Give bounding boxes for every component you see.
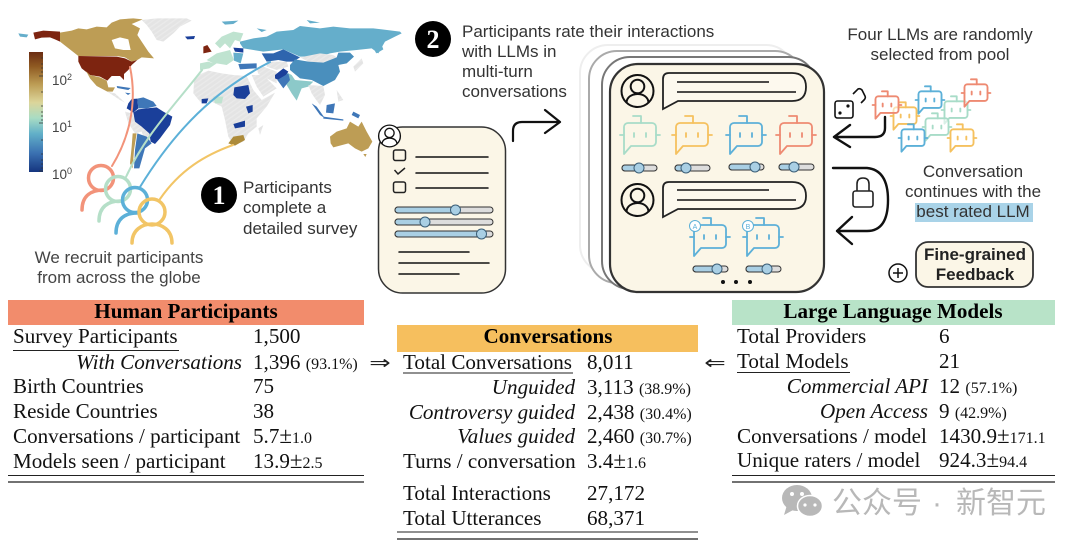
- text: recruit participants: [35, 248, 203, 287]
- panel: conversations table: 27,172: [587, 481, 645, 505]
- watermark: 新智元: [956, 487, 1046, 520]
- panel: conversations table: 3,113 (38.9%): [587, 375, 691, 399]
- central asia: [267, 62, 288, 70]
- icon: dice: [835, 89, 865, 118]
- panel: conversations table: Total Utterances: [403, 506, 542, 530]
- icon: plus: [889, 264, 907, 282]
- colour scale: 0: [67, 166, 72, 176]
- colour scale: 10: [52, 73, 67, 88]
- icon: yellow person: [132, 199, 172, 243]
- panel: large language models table: 1430.9±171.1: [939, 423, 1046, 448]
- panel: large language models table: 12 (57.1%): [939, 374, 1017, 398]
- panel: conversations table: Turns / conversation: [403, 449, 576, 473]
- icon: participants group: [82, 166, 172, 243]
- western europe: [200, 50, 234, 70]
- colombia: [127, 99, 138, 113]
- panel: conversations table: 3.4±1.6: [587, 448, 646, 473]
- bot rating sliders: [622, 162, 814, 173]
- panel: large language models table: 9 (42.9%): [939, 399, 1007, 423]
- panel: human participants table: 13.9±2.5: [253, 448, 323, 473]
- text: best rated LLM: [905, 162, 1041, 222]
- arrow: participants to conversations: ⇒: [369, 352, 391, 374]
- panel: human participants table: Models seen / participant: [13, 449, 226, 473]
- panel: large language models table: Open Access: [820, 399, 928, 423]
- panel: stacked conversation cards: [580, 45, 824, 292]
- china: [290, 53, 354, 86]
- indonesia and malaysia: [312, 103, 360, 121]
- ellipsis dots: [721, 280, 752, 284]
- step 1 badge: [201, 177, 237, 213]
- colour scale: [29, 52, 72, 182]
- panel: large language models table: 21: [939, 349, 960, 373]
- australia: [330, 122, 372, 157]
- text: step 2: conversations: [462, 82, 567, 101]
- brazil: [133, 107, 172, 144]
- india: [285, 72, 313, 101]
- arrow: survey to conversation: [513, 110, 560, 141]
- argentina: [134, 133, 152, 168]
- icon: bots A and B: [690, 218, 783, 256]
- A and B sliders: [693, 264, 781, 274]
- panel: human participants table: 75: [253, 374, 274, 398]
- hatched east asia: [337, 58, 363, 102]
- icon: LLM pool: [873, 79, 990, 152]
- survey checkboxes: [394, 150, 406, 192]
- text: best rated LLM: Conversation: [923, 162, 1023, 181]
- pakistan: [277, 73, 290, 88]
- watermark: ·: [932, 487, 942, 520]
- caribbean: [117, 86, 131, 95]
- greenland: [142, 18, 192, 42]
- colour scale: 2: [67, 72, 72, 82]
- middle east: [252, 67, 277, 97]
- panel: human participants table: Reside Countries: [13, 399, 158, 423]
- usa: [78, 56, 137, 81]
- fine-grained feedback box: Feedback: [936, 265, 1015, 284]
- panel: human participants table: Human Participants: [94, 299, 278, 323]
- panel: conversations table: 68,371: [587, 506, 645, 530]
- sudan, kenya, zambia, ghana: [202, 85, 253, 128]
- icon: green person: [99, 176, 130, 221]
- survey text lines: [399, 157, 489, 274]
- icon: survey person: [379, 125, 400, 147]
- madagascar: [258, 125, 263, 135]
- text: recruit participants: We recruit participants: [35, 248, 203, 267]
- central america: [107, 92, 125, 103]
- icon: four bots: [620, 116, 816, 154]
- text: four LLMs: Four LLMs are randomly: [847, 25, 1033, 44]
- panel: large language models table: Total Providers: [737, 324, 866, 348]
- south africa: [228, 135, 245, 146]
- text: step 1: complete a: [243, 198, 327, 217]
- panel: human participants table: 1,396 (93.1%): [253, 350, 358, 374]
- panel: human participants table: [8, 299, 364, 482]
- panel: conversations table: 2,438 (30.4%): [587, 400, 692, 424]
- panel: survey card: [378, 125, 506, 293]
- main card: [610, 64, 824, 292]
- step 2 badge: [415, 21, 451, 57]
- colour scale: 10: [52, 120, 67, 135]
- panel: conversations table: Values guided: [457, 424, 575, 448]
- watermark: [782, 485, 1046, 520]
- colour scale: 1: [67, 119, 72, 129]
- world map: [18, 18, 402, 168]
- panel: large language models table: Total Models: [737, 349, 849, 373]
- panel: large language models table: Commercial API: [787, 374, 929, 398]
- panel: large language models table: 924.3±94.4: [939, 447, 1027, 472]
- panel: large language models table: [732, 299, 1055, 482]
- panel: conversations table: Controversy guided: [409, 400, 575, 424]
- chile: [130, 133, 137, 168]
- text: step 1: [243, 178, 358, 238]
- arrow: models to conversations: ⇐: [704, 352, 726, 374]
- eastern europe: [233, 53, 243, 63]
- survey sliders: [395, 205, 493, 239]
- southeast asia: [308, 85, 325, 105]
- afghanistan: [275, 68, 288, 82]
- text: recruit participants: from across the globe: [37, 268, 201, 287]
- small northern islands: [18, 20, 320, 37]
- panel: human participants table: Conversations / participant: [13, 424, 240, 448]
- hudson bay: [112, 37, 131, 50]
- watermark: 公众号: [832, 487, 922, 520]
- alaska: [33, 31, 60, 42]
- text: step 1: Participants: [243, 178, 332, 197]
- panel: conversations table: 2,460 (30.7%): [587, 424, 692, 448]
- panel: conversations table: Unguided: [492, 375, 575, 399]
- fine-grained feedback box: [916, 242, 1033, 287]
- panel: conversations table: [397, 324, 698, 539]
- scandinavia: [215, 32, 243, 48]
- icon: bots A and B: B: [746, 224, 751, 231]
- text: four LLMs: [847, 25, 1033, 64]
- nigeria: [213, 97, 223, 103]
- text: best rated LLM: continues with the: [905, 182, 1041, 201]
- icon: wechat: [782, 485, 822, 516]
- hatched south america: [125, 112, 152, 142]
- panel: conversations table: Conversations: [484, 324, 612, 348]
- panel: large language models table: Conversations / model: [737, 424, 927, 448]
- step 2 badge: 2: [426, 25, 440, 54]
- panel: large language models table: Large Language Models: [783, 299, 1003, 323]
- fine-grained feedback box: Fine-grained: [924, 245, 1026, 264]
- panel: human participants table: With Conversations: [76, 350, 242, 374]
- panel: human participants table: 1,500: [253, 324, 300, 348]
- uk: [203, 45, 212, 53]
- panel: conversations table: 8,011: [587, 350, 634, 374]
- panel: large language models table: Unique raters / model: [737, 448, 920, 472]
- panel: conversations table: Total Interactions: [403, 481, 551, 505]
- speech bubble 2: [663, 182, 806, 217]
- icon: user 1: [622, 75, 654, 107]
- text: four LLMs: selected from pool: [871, 45, 1009, 64]
- icon: blue person: [116, 188, 148, 233]
- panel: human participants table: 5.7±1.0: [253, 423, 312, 448]
- panel: conversations table: Total Conversations: [403, 350, 572, 374]
- canada: [60, 18, 154, 62]
- text: step 2: Participants rate their interactions: [462, 22, 714, 41]
- back cards: [580, 45, 816, 289]
- text: step 1: detailed survey: [243, 219, 358, 238]
- mexico: [86, 71, 115, 92]
- panel: large language models table: 6: [939, 324, 950, 348]
- ukraine: [233, 48, 243, 53]
- africa: [193, 71, 275, 145]
- icon: user 2: [622, 184, 654, 216]
- arrow: from pool to card: [834, 117, 885, 147]
- step 1 badge: 1: [212, 181, 226, 210]
- russia: [240, 26, 402, 57]
- turkey: [238, 63, 257, 69]
- text: step 2: [461, 22, 714, 101]
- arrow: locked loop: [833, 168, 888, 244]
- text: step 2: with LLMs in: [461, 42, 556, 61]
- panel: human participants table: 38: [253, 399, 274, 423]
- icon: lock: [853, 178, 873, 207]
- mongolia: [300, 53, 337, 63]
- colour scale: 10: [52, 167, 67, 182]
- kazakhstan: [262, 49, 300, 62]
- icon: coral person: [82, 166, 114, 210]
- recruitment arcs: [112, 62, 270, 199]
- japan and korea: [375, 45, 383, 53]
- text: step 2: multi-turn: [462, 62, 533, 81]
- speech bubble 1: [663, 73, 806, 109]
- text: best rated LLM: best rated LLM: [916, 202, 1030, 221]
- venezuela: [137, 97, 157, 108]
- panel: human participants table: Survey Participants: [13, 324, 178, 348]
- iceland: [185, 36, 195, 39]
- icon: bots A and B: A: [693, 224, 698, 231]
- panel: human participants table: Birth Countries: [13, 374, 144, 398]
